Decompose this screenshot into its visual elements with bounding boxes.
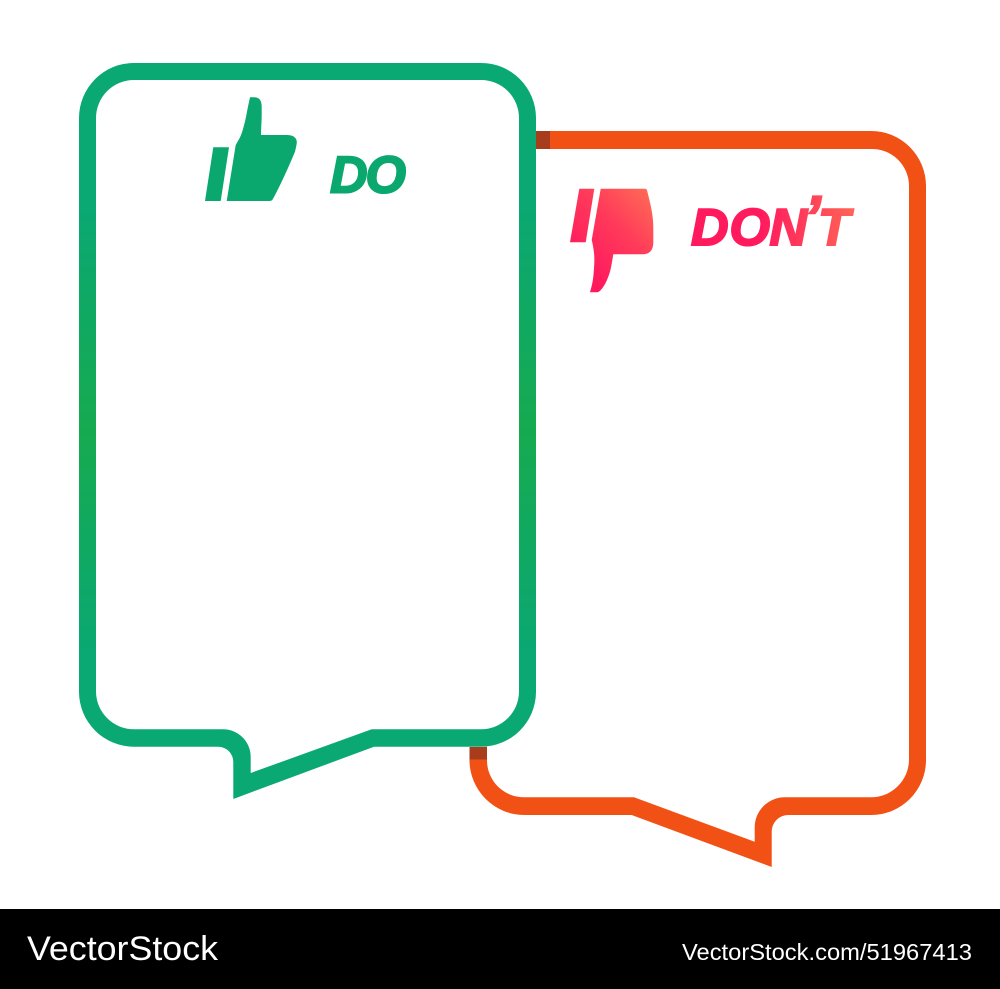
- footer bar: [0, 909, 1000, 989]
- icon: thumbs up: [205, 97, 297, 201]
- label: DO: DO: [330, 146, 406, 204]
- icon: thumbs down: [570, 189, 653, 292]
- footer logo text: VectorStock: [27, 930, 219, 968]
- overlap: bottom band: [470, 740, 487, 760]
- footer image id: VectorStock.com/51967413: [682, 939, 972, 965]
- panel: do speech bubble: [79, 63, 536, 799]
- panel: do speech bubble outline: [79, 63, 536, 799]
- label: DON'T: T: [818, 199, 854, 257]
- overlap: top band: [530, 131, 550, 149]
- label: DON'T: DON: [691, 199, 808, 257]
- label: DON'T: ’: [804, 184, 822, 251]
- panel: don't speech bubble: [470, 131, 926, 867]
